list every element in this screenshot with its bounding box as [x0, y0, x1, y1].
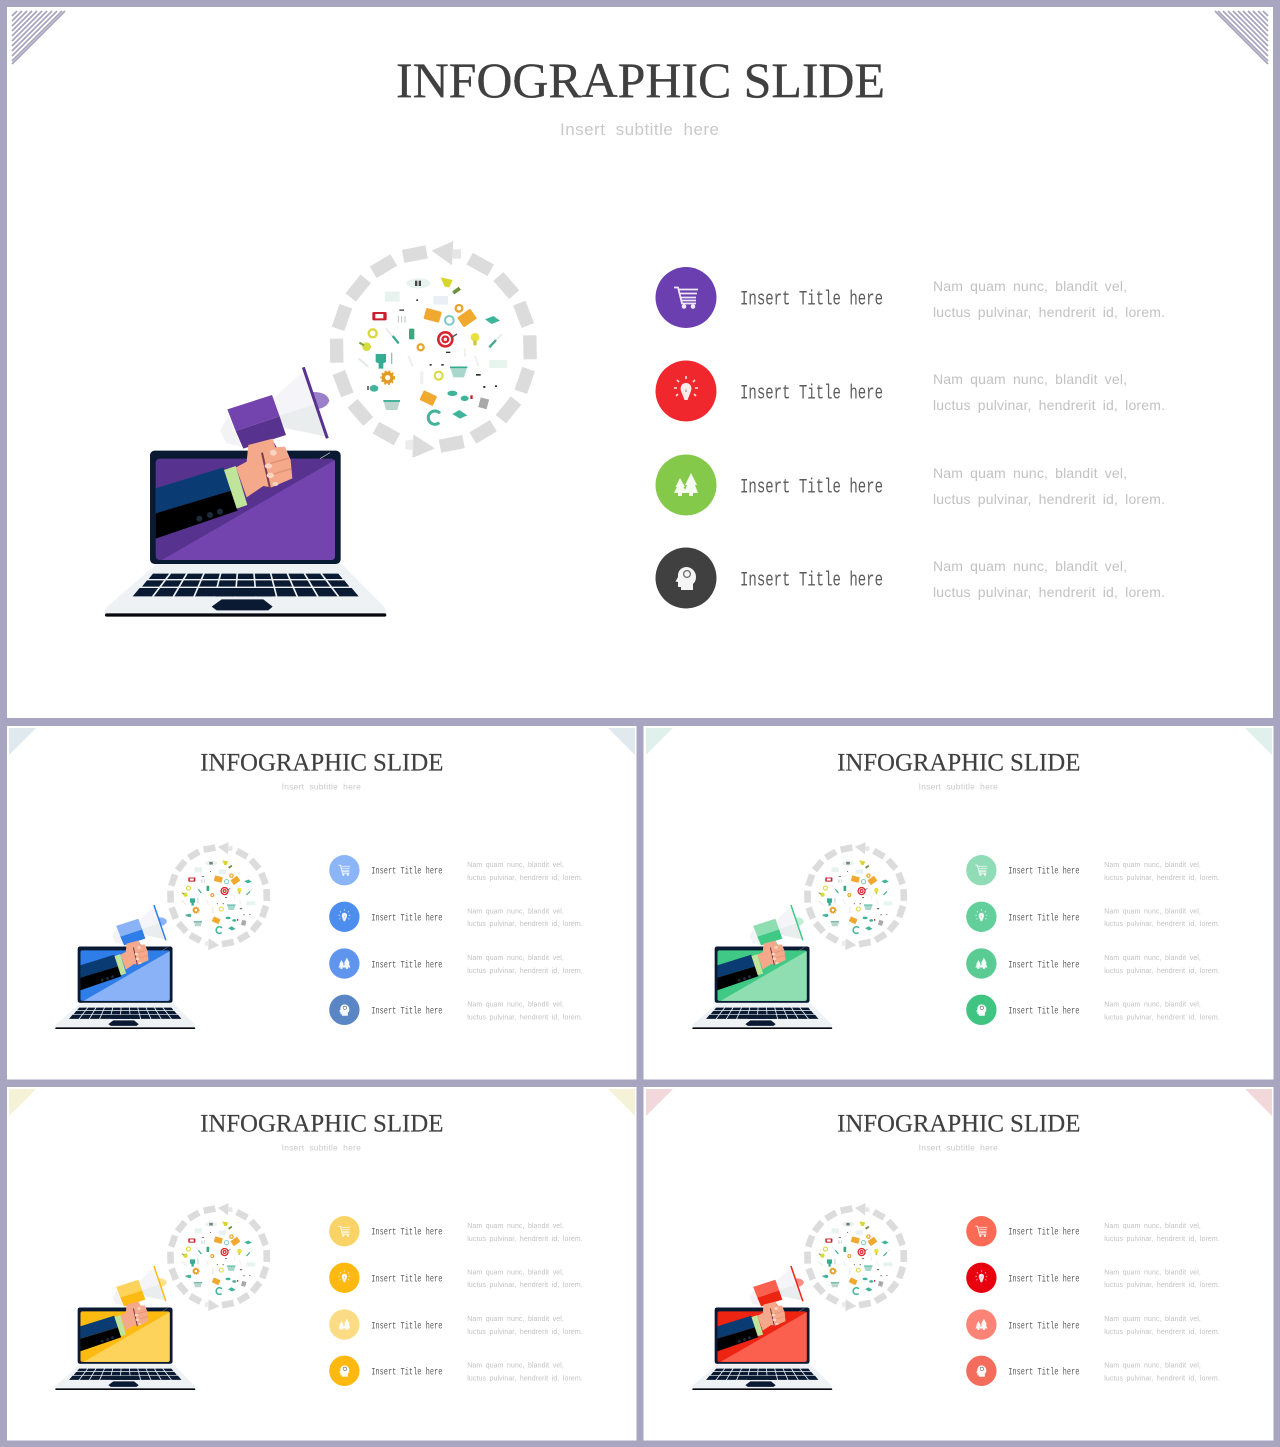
item 2: Nam quam nunc, blandit vel,	[1104, 908, 1201, 915]
item 4: luctus pulvinar, hendrerit id, lorem.	[933, 584, 1165, 600]
item 4	[966, 1356, 1220, 1386]
item 2: Nam quam nunc, blandit vel,	[467, 1269, 564, 1276]
item 1	[329, 1216, 583, 1246]
title: INFOGRAPHIC SLIDE	[200, 1110, 443, 1137]
item 3	[656, 454, 1165, 516]
item 4	[329, 995, 583, 1025]
item 4: Insert Title here	[1008, 1006, 1079, 1017]
item 1: luctus pulvinar, hendrerit id, lorem.	[467, 875, 583, 882]
item 4	[966, 995, 1220, 1025]
corner hatch right	[1215, 11, 1268, 64]
item 4: luctus pulvinar, hendrerit id, lorem.	[467, 1014, 583, 1021]
item 1	[329, 855, 583, 885]
item 2: Nam quam nunc, blandit vel,	[933, 371, 1127, 387]
panel: red slide	[644, 1087, 1274, 1440]
subtitle: Insert subtitle here	[282, 781, 361, 791]
panel: blue slide	[7, 726, 636, 1080]
panel: green slide	[644, 726, 1274, 1080]
item 1	[966, 855, 1220, 885]
item 4: Nam quam nunc, blandit vel,	[933, 558, 1127, 574]
illustration: laptop with megaphone	[692, 1203, 907, 1389]
item 2: Insert Title here	[371, 1273, 442, 1284]
corner right	[1245, 1089, 1272, 1116]
item 1: luctus pulvinar, hendrerit id, lorem.	[1104, 875, 1220, 882]
corner left	[646, 728, 673, 755]
item 4: Insert Title here	[740, 570, 883, 592]
title: INFOGRAPHIC SLIDE	[837, 1110, 1080, 1137]
item 3: Insert Title here	[371, 1320, 442, 1331]
item 3	[966, 948, 1220, 979]
illustration: laptop with megaphone	[105, 241, 537, 615]
item 3: Insert Title here	[740, 476, 883, 500]
item 3: Nam quam nunc, blandit vel,	[467, 955, 564, 962]
item 2: Insert Title here	[740, 382, 883, 406]
panel: main slide	[7, 7, 1273, 718]
item 1: luctus pulvinar, hendrerit id, lorem.	[933, 304, 1165, 320]
panel: yellow slide	[7, 1087, 636, 1440]
item 1: Insert Title here	[740, 288, 883, 312]
corner left	[646, 1089, 673, 1116]
item 2	[966, 902, 1220, 932]
item 2: luctus pulvinar, hendrerit id, lorem.	[933, 397, 1165, 413]
item 3: Nam quam nunc, blandit vel,	[1104, 955, 1201, 962]
item 1: Nam quam nunc, blandit vel,	[1104, 1223, 1201, 1230]
corner right	[608, 728, 635, 755]
item 2	[966, 1263, 1220, 1293]
item 3	[329, 948, 583, 979]
item 2: luctus pulvinar, hendrerit id, lorem.	[467, 1282, 583, 1289]
item 1: Nam quam nunc, blandit vel,	[467, 862, 564, 869]
item 2	[329, 1263, 583, 1293]
item 4: Insert Title here	[371, 1006, 442, 1017]
item 1: Insert Title here	[1008, 1227, 1079, 1238]
item 1: luctus pulvinar, hendrerit id, lorem.	[467, 1236, 583, 1243]
item 2	[329, 902, 583, 932]
item 2	[656, 360, 1165, 422]
subtitle: Insert subtitle here	[919, 781, 998, 791]
item 1: Nam quam nunc, blandit vel,	[1104, 862, 1201, 869]
item 4: Nam quam nunc, blandit vel,	[1104, 1362, 1201, 1369]
item 4: luctus pulvinar, hendrerit id, lorem.	[1104, 1375, 1220, 1382]
slide content	[692, 1110, 1220, 1389]
item 1: Nam quam nunc, blandit vel,	[933, 278, 1127, 294]
item 2: Insert Title here	[1008, 912, 1079, 923]
item 1: Insert Title here	[371, 866, 442, 877]
slide content	[692, 749, 1220, 1028]
corner hatch left	[12, 11, 65, 64]
item 3: luctus pulvinar, hendrerit id, lorem.	[1104, 1329, 1220, 1336]
item 2: luctus pulvinar, hendrerit id, lorem.	[1104, 1282, 1220, 1289]
item 4: Insert Title here	[1008, 1367, 1079, 1378]
item 2: Nam quam nunc, blandit vel,	[1104, 1269, 1201, 1276]
illustration: laptop with megaphone	[692, 842, 907, 1028]
item 3: Nam quam nunc, blandit vel,	[1104, 1316, 1201, 1323]
corner right	[1245, 728, 1272, 755]
item 1	[656, 267, 1165, 328]
item 3: Insert Title here	[1008, 959, 1079, 970]
item 3	[966, 1309, 1220, 1340]
item 1: Insert Title here	[371, 1227, 442, 1238]
item 4: Nam quam nunc, blandit vel,	[467, 1001, 564, 1008]
corner left	[9, 1089, 36, 1116]
item 3: luctus pulvinar, hendrerit id, lorem.	[933, 491, 1165, 507]
item 4: Nam quam nunc, blandit vel,	[1104, 1001, 1201, 1008]
item 4: Insert Title here	[371, 1367, 442, 1378]
item 2: Insert Title here	[371, 912, 442, 923]
illustration: laptop with megaphone	[55, 842, 270, 1028]
item 3: Insert Title here	[371, 959, 442, 970]
item 2: luctus pulvinar, hendrerit id, lorem.	[467, 921, 583, 928]
item 3: Insert Title here	[1008, 1320, 1079, 1331]
item 3: Nam quam nunc, blandit vel,	[467, 1316, 564, 1323]
item 3: luctus pulvinar, hendrerit id, lorem.	[1104, 968, 1220, 975]
title: INFOGRAPHIC SLIDE	[396, 52, 885, 108]
subtitle: Insert subtitle here	[282, 1142, 361, 1152]
item 1	[966, 1216, 1220, 1246]
subtitle: Insert subtitle here	[919, 1142, 998, 1152]
item 2: luctus pulvinar, hendrerit id, lorem.	[1104, 921, 1220, 928]
item 3: luctus pulvinar, hendrerit id, lorem.	[467, 1329, 583, 1336]
item 2: Insert Title here	[1008, 1273, 1079, 1284]
item 1: Insert Title here	[1008, 866, 1079, 877]
item 3: Nam quam nunc, blandit vel,	[933, 465, 1127, 481]
illustration: laptop with megaphone	[55, 1203, 270, 1389]
corner right	[608, 1089, 635, 1116]
item 3: luctus pulvinar, hendrerit id, lorem.	[467, 968, 583, 975]
item 3	[329, 1309, 583, 1340]
title: INFOGRAPHIC SLIDE	[837, 749, 1080, 776]
item 1: Nam quam nunc, blandit vel,	[467, 1223, 564, 1230]
slide content	[55, 1110, 583, 1389]
item 4	[656, 548, 1165, 608]
subtitle: Insert subtitle here	[560, 120, 719, 139]
item 4: luctus pulvinar, hendrerit id, lorem.	[467, 1375, 583, 1382]
item 4	[329, 1356, 583, 1386]
title: INFOGRAPHIC SLIDE	[200, 749, 443, 776]
item 1: luctus pulvinar, hendrerit id, lorem.	[1104, 1236, 1220, 1243]
item 4: luctus pulvinar, hendrerit id, lorem.	[1104, 1014, 1220, 1021]
corner left	[9, 728, 36, 755]
item 4: Nam quam nunc, blandit vel,	[467, 1362, 564, 1369]
slide content	[55, 749, 583, 1028]
item 2: Nam quam nunc, blandit vel,	[467, 908, 564, 915]
